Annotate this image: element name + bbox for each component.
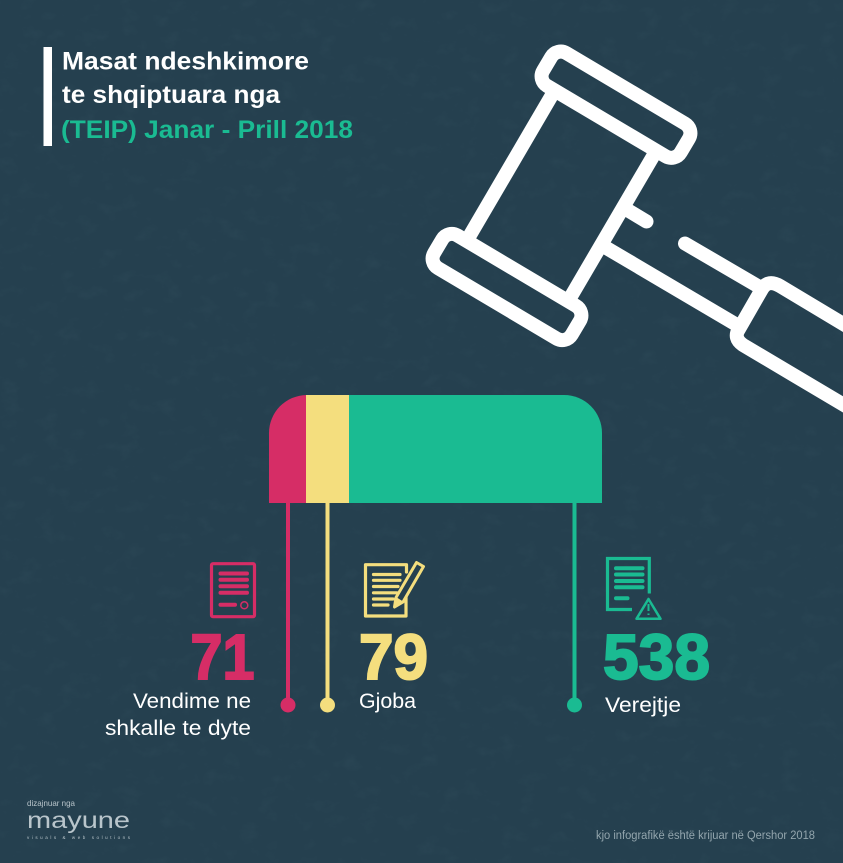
designer credit logo: mayune [27,807,130,833]
designer credit logo [27,798,131,840]
label: verejtje: Verejtje [605,694,681,717]
title block: Masat ndeshkimore [62,48,309,76]
connector: pink [280,503,296,712]
title block: te shqiptuara nga [62,81,281,109]
connector: green [567,503,582,712]
stat: 538: 538 [603,621,710,693]
title block: (TEIP) Janar - Prill 2018 [61,116,353,144]
designer credit logo: dizajnuar nga [27,798,75,808]
bar segment: 71 vendime [269,395,306,503]
stat: 79: 79 [359,621,428,693]
icon: pink document [212,564,254,617]
label: gjoba: Gjoba [359,690,416,713]
title block [44,47,353,146]
bar segment: 538 verejtje [349,395,602,503]
footer note: kjo infografikë është krijuar në Qershor 2018 [596,830,815,842]
icon: yellow document with pencil [366,562,424,616]
stat: 71: 71 [190,621,254,693]
stacked bar chart [269,395,602,503]
label: vendime ne shkalle te dyte [105,690,251,740]
bar segment: 79 gjoba [306,395,349,503]
connector: yellow [320,503,335,712]
icon: green document with warning [608,558,660,619]
icon: judge gavel [429,48,843,414]
label: vendime ne shkalle te dyte: shkalle te dyte [105,717,251,740]
designer credit logo: visuals & web solutions [27,835,131,840]
label: vendime ne shkalle te dyte: Vendime ne [133,690,251,713]
